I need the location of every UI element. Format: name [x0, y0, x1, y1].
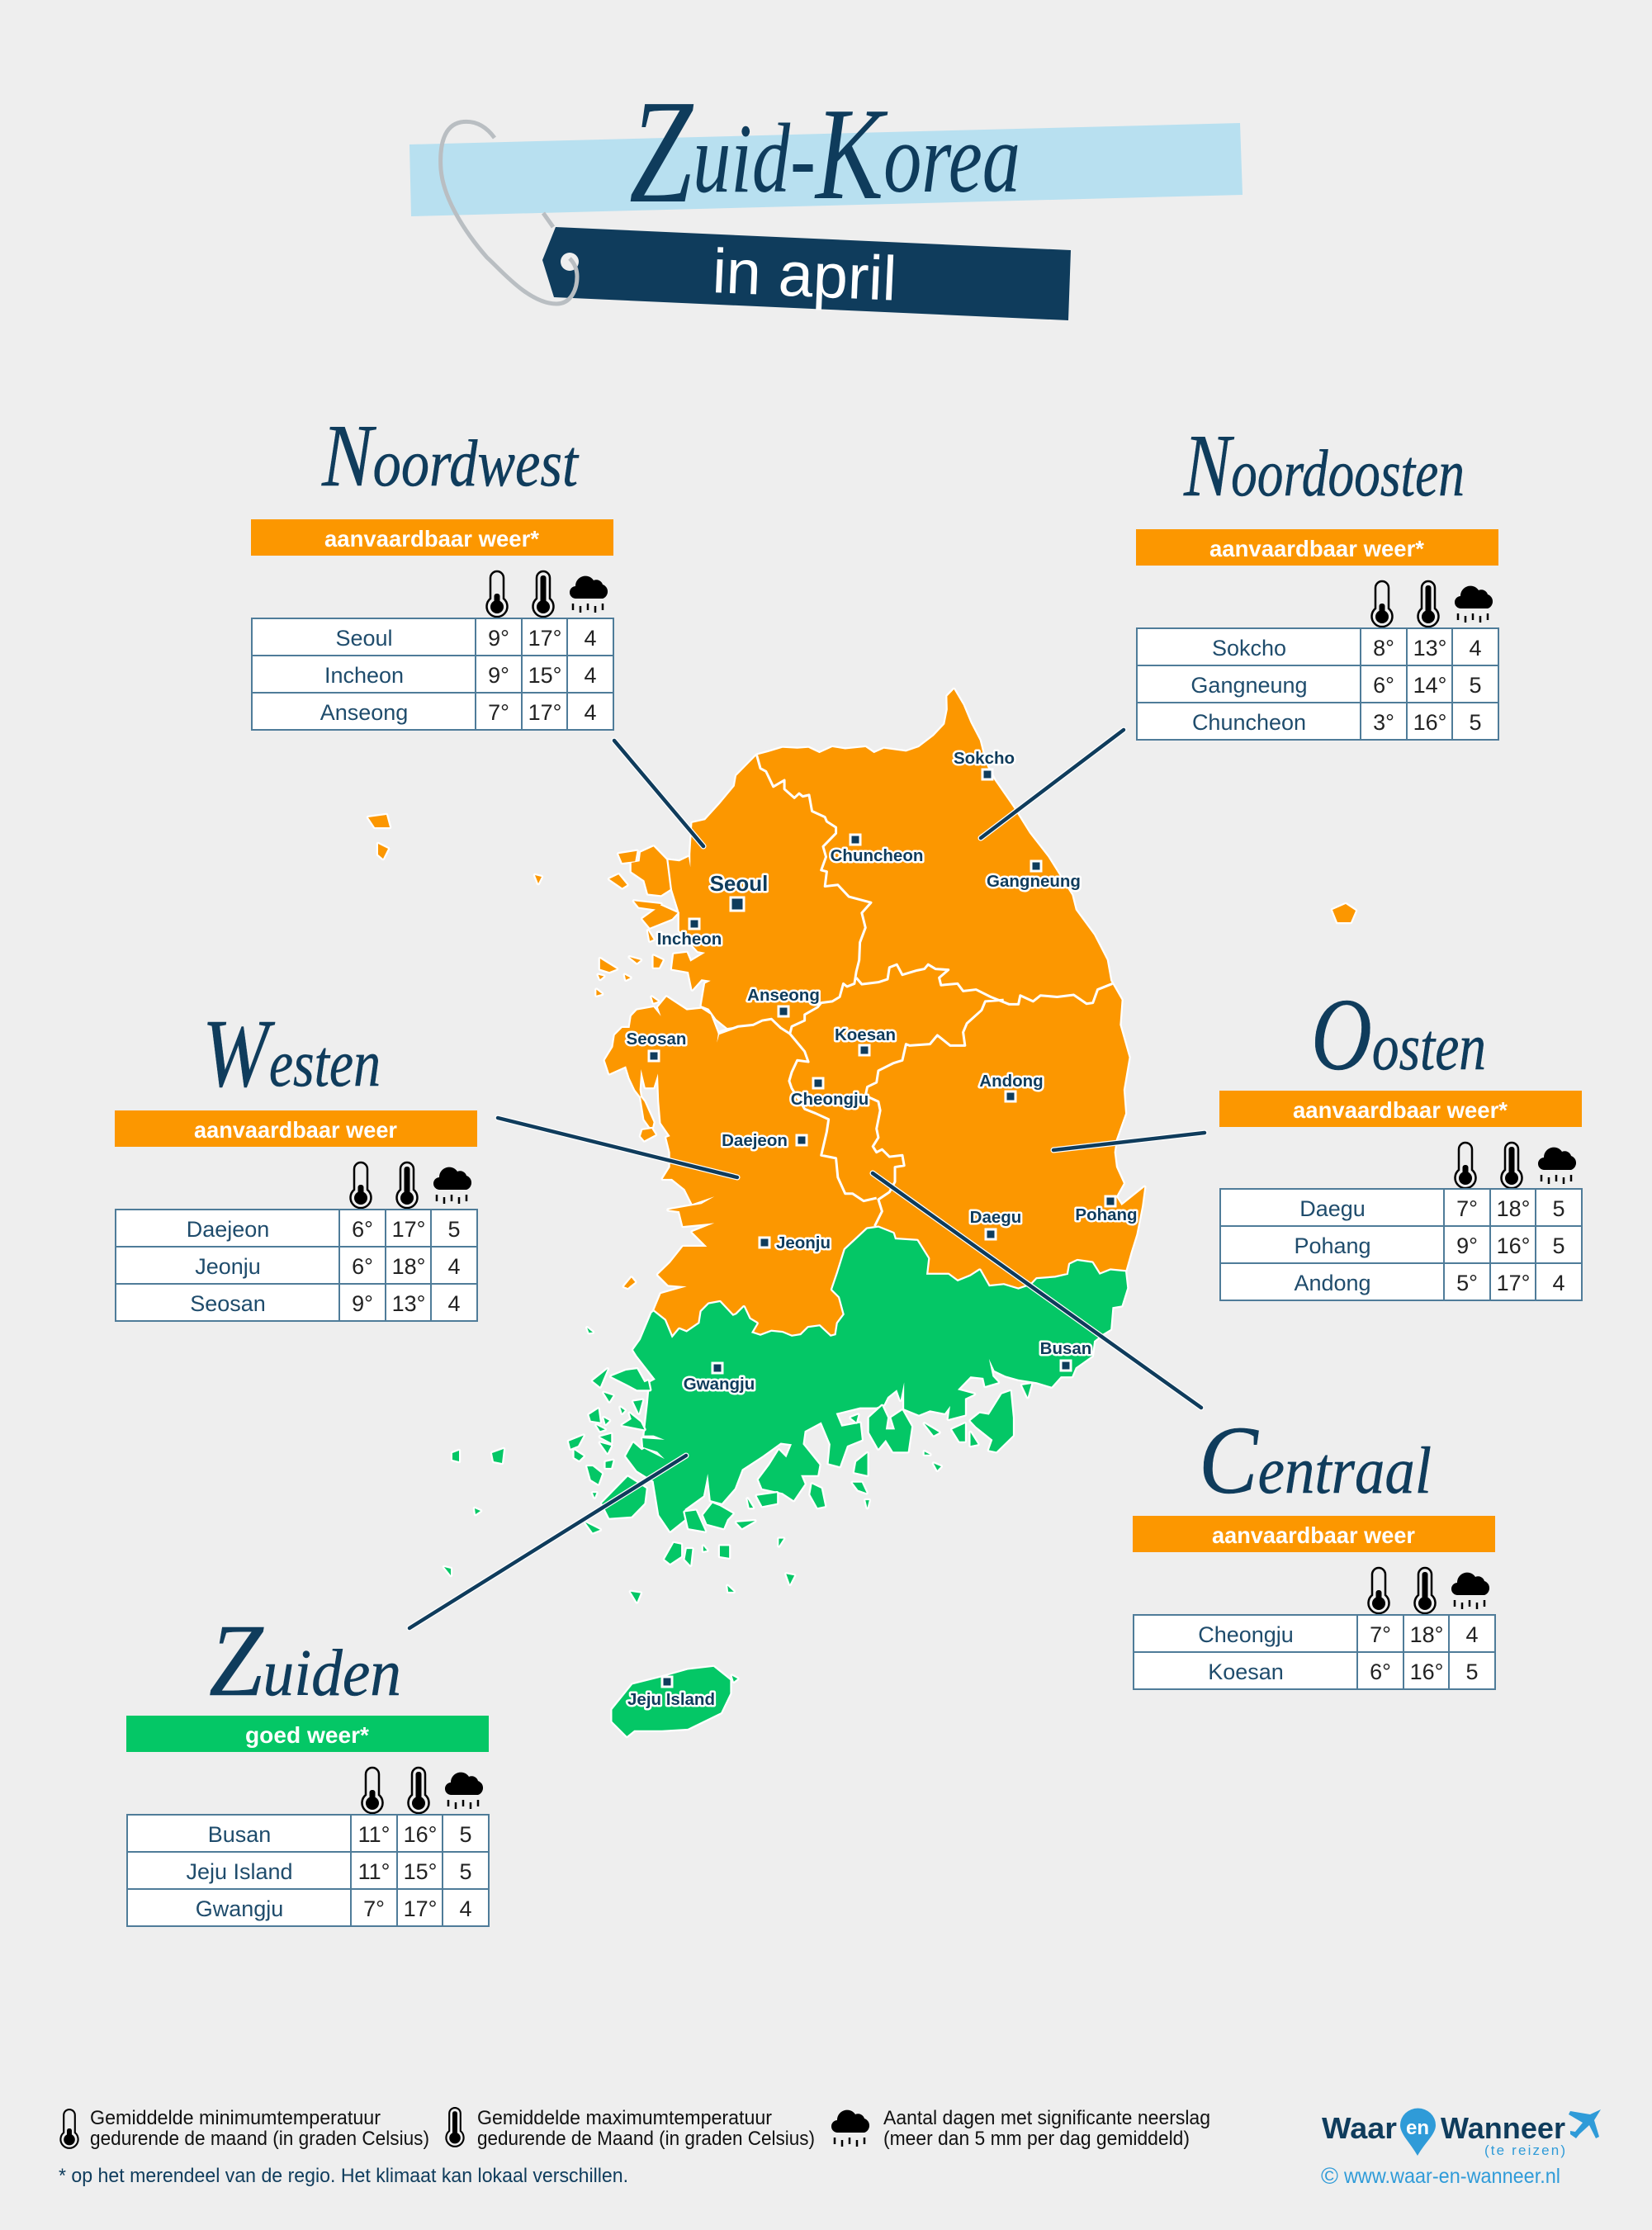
- weather table: 9°: [352, 1291, 373, 1316]
- weather table: 7°: [488, 700, 509, 725]
- status bar: [1133, 1516, 1495, 1552]
- city: Chuncheon: [831, 835, 923, 865]
- weather table: 5: [459, 1822, 472, 1847]
- icon: weather icons: [1455, 1143, 1576, 1188]
- dark tag: [542, 227, 1071, 320]
- city: Anseong: Anseong: [747, 986, 820, 1005]
- city: Busan: [1040, 1339, 1091, 1371]
- weather table: [1137, 628, 1498, 740]
- weather table: Sokcho: [1212, 636, 1286, 660]
- weather table: 16°: [404, 1822, 437, 1847]
- city: Gwangju: [684, 1363, 755, 1394]
- leader: Centraal: [873, 1173, 1201, 1408]
- weather table: 5: [447, 1217, 461, 1242]
- logo text: (te reizen): [1484, 2142, 1565, 2158]
- city: Jeju Island: Jeju Island: [627, 1690, 715, 1709]
- weather table: Seosan: [190, 1291, 266, 1316]
- city: Incheon: Incheon: [657, 930, 722, 949]
- legend text: maximum temperature: Gemiddelde maximumtemperatuur: [477, 2107, 772, 2129]
- weather table: 5: [1469, 710, 1482, 735]
- title text: Z: [629, 69, 694, 234]
- icon: minimum temperature: [60, 2109, 78, 2148]
- weather table: 13°: [1413, 636, 1446, 660]
- weather table: 9°: [488, 663, 509, 688]
- title banner: [409, 69, 1243, 320]
- city: Daegu: [970, 1208, 1021, 1239]
- weather table: 14°: [1413, 673, 1446, 698]
- legend text: minimum temperature: gedurende de maand (in graden Celsius): [90, 2128, 429, 2150]
- city: Pohang: Pohang: [1075, 1205, 1138, 1224]
- status bar: goed weer*: [245, 1722, 369, 1748]
- weather table: 9°: [1456, 1233, 1478, 1258]
- weather table: 4: [1465, 1622, 1479, 1647]
- panel: Centraal: [1133, 1406, 1495, 1689]
- city: Jeonju: Jeonju: [776, 1233, 831, 1252]
- weather table: 17°: [392, 1217, 425, 1242]
- heading: Westen: Westen: [202, 999, 381, 1107]
- weather table: Busan: [208, 1822, 271, 1847]
- weather table: [1134, 1615, 1495, 1689]
- city: Gangneung: Gangneung: [987, 872, 1081, 891]
- south region, green: [569, 1228, 1127, 1584]
- legend text: minimum temperature: [90, 2107, 429, 2150]
- weather table: 5: [1552, 1233, 1565, 1258]
- weather table: [1220, 1189, 1582, 1300]
- status bar: [251, 519, 613, 556]
- map of South Korea: [368, 689, 1356, 1736]
- weather table: 6°: [352, 1217, 373, 1242]
- heading: Zuiden: Zuiden: [209, 1604, 401, 1718]
- city: Koesan: Koesan: [835, 1025, 896, 1044]
- icon: maximum temperature: [446, 2108, 464, 2147]
- logo: Waar en Wanneer: [1321, 2109, 1601, 2189]
- weather table: 4: [584, 626, 597, 651]
- weather table: [127, 1815, 489, 1926]
- region borders: [718, 755, 1112, 1226]
- status bar: aanvaardbaar weer*: [324, 526, 539, 552]
- icon: weather icons: [1372, 581, 1493, 627]
- city: Andong: [979, 1072, 1044, 1101]
- weather table: 7°: [1370, 1622, 1391, 1647]
- tag string: [441, 121, 577, 304]
- north and centre regions, orange: [596, 689, 1144, 1338]
- website link: www.waar-en-wanneer.nl: [1343, 2165, 1560, 2188]
- icon: precipitation: [831, 2110, 869, 2147]
- far western islands, green: [444, 1449, 504, 1575]
- weather table: [116, 1210, 477, 1321]
- city: Anseong: [747, 986, 820, 1016]
- northwest islands: [596, 846, 678, 1288]
- city: Pohang: [1075, 1196, 1138, 1224]
- weather table: 4: [584, 700, 597, 725]
- weather table: 15°: [404, 1859, 437, 1884]
- legend text: maximum temperature: [477, 2107, 815, 2150]
- status bar: aanvaardbaar weer*: [1209, 536, 1424, 561]
- weather table: Pohang: [1294, 1233, 1371, 1258]
- weather table: 5: [459, 1859, 472, 1884]
- icon: plane: [1569, 2109, 1601, 2138]
- weather table: 16°: [1413, 710, 1446, 735]
- weather table: 7°: [363, 1896, 385, 1921]
- far islands, orange: [368, 815, 1356, 922]
- city: Cheongju: [791, 1078, 869, 1109]
- tag hole: [561, 253, 579, 271]
- city: Seosan: Seosan: [627, 1030, 686, 1049]
- weather table: 6°: [352, 1254, 373, 1279]
- status bar: aanvaardbaar weer: [1212, 1522, 1415, 1548]
- footnote: * op het merendeel van de regio. Het klimaat kan lokaal verschillen.: [59, 2165, 628, 2187]
- city: Andong: Andong: [979, 1072, 1044, 1091]
- city: Daegu: Daegu: [970, 1208, 1021, 1227]
- weather table: 18°: [1410, 1622, 1443, 1647]
- city: Gwangju: Gwangju: [684, 1375, 755, 1394]
- icon: weather icons: [1369, 1568, 1489, 1613]
- panel: Westen: [115, 999, 477, 1321]
- heading: Oosten: Oosten: [1311, 978, 1486, 1092]
- legend text: precipitation: [883, 2107, 1210, 2150]
- title text: uid-: [693, 103, 816, 213]
- weather table: 15°: [528, 663, 561, 688]
- weather table: 5: [1465, 1659, 1479, 1684]
- city: Seoul: Seoul: [710, 871, 768, 896]
- weather table: 17°: [528, 700, 561, 725]
- Jeju island and small southern islands: [613, 1586, 737, 1736]
- weather table: 16°: [1410, 1659, 1443, 1684]
- title text: orea: [883, 103, 1020, 213]
- weather table: 11°: [358, 1859, 390, 1884]
- weather table: Incheon: [324, 663, 404, 688]
- logo text: Waar: [1322, 2111, 1397, 2145]
- legend: [59, 2107, 1210, 2187]
- weather table: 5: [1552, 1196, 1565, 1221]
- weather table: Chuncheon: [1192, 710, 1306, 735]
- weather table: Cheongju: [1198, 1622, 1294, 1647]
- weather table: 3°: [1373, 710, 1394, 735]
- panel: Oosten: [1219, 978, 1582, 1300]
- city: Sokcho: Sokcho: [954, 749, 1015, 768]
- weather table: [252, 618, 613, 730]
- logo text: [1322, 2111, 1565, 2158]
- weather table: 13°: [392, 1291, 425, 1316]
- status bar: aanvaardbaar weer: [194, 1117, 397, 1143]
- heading: Centraal: Centraal: [1199, 1406, 1432, 1514]
- weather table: 4: [459, 1896, 472, 1921]
- legend text: maximum temperature: gedurende de Maand (in graden Celsius): [477, 2128, 815, 2150]
- weather table: 5: [1469, 673, 1482, 698]
- status bar: [126, 1716, 489, 1752]
- city: Busan: Busan: [1040, 1339, 1091, 1358]
- weather table: 16°: [1497, 1233, 1530, 1258]
- status bar: aanvaardbaar weer*: [1293, 1097, 1508, 1123]
- light blue title band: [409, 123, 1243, 216]
- weather table: 6°: [1370, 1659, 1391, 1684]
- weather table: 4: [584, 663, 597, 688]
- weather table: Koesan: [1208, 1659, 1284, 1684]
- weather table: 4: [447, 1291, 461, 1316]
- city: Gangneung: [987, 861, 1081, 891]
- heading: Noordoosten: Noordoosten: [1183, 417, 1465, 515]
- subtitle: in april: [711, 236, 898, 315]
- weather table: 17°: [528, 626, 561, 651]
- city: Jeju Island: [627, 1677, 715, 1709]
- weather table: Daegu: [1299, 1196, 1366, 1221]
- logo pin: [1400, 2109, 1436, 2156]
- city: Seosan: [627, 1030, 686, 1061]
- panel: Noordoosten: [1136, 417, 1498, 740]
- status bar: [1136, 529, 1498, 566]
- leader: Zuiden: [409, 1456, 686, 1628]
- weather table: 18°: [1497, 1196, 1530, 1221]
- weather table: 9°: [488, 626, 509, 651]
- weather table: 4: [447, 1254, 461, 1279]
- weather table: 5°: [1456, 1271, 1478, 1295]
- legend text: minimum temperature: Gemiddelde minimumtemperatuur: [90, 2107, 381, 2129]
- leader: Noordwest: [614, 741, 703, 846]
- city: Seoul: [710, 871, 768, 911]
- leader lines: [409, 730, 1205, 1628]
- heading: Noordwest: Noordwest: [321, 407, 580, 505]
- title text: K: [814, 80, 888, 227]
- city: Sokcho: [954, 749, 1015, 779]
- weather table: 8°: [1373, 636, 1394, 660]
- panel: Zuiden: [126, 1604, 489, 1926]
- leader: Noordoosten: [981, 730, 1124, 838]
- legend text: precipitation: Aantal dagen met significante neerslag: [883, 2107, 1210, 2129]
- status bar: [115, 1110, 477, 1147]
- city: Incheon: [657, 919, 722, 949]
- city: Chuncheon: Chuncheon: [831, 846, 923, 865]
- status bar: [1219, 1091, 1582, 1127]
- weather table: Jeonju: [195, 1254, 261, 1279]
- city: Koesan: [835, 1025, 896, 1055]
- weather table: Gangneung: [1190, 673, 1308, 698]
- weather table: Jeju Island: [186, 1859, 293, 1884]
- weather table: 11°: [358, 1822, 390, 1847]
- city labels: [627, 749, 1138, 1709]
- weather table: 18°: [392, 1254, 425, 1279]
- weather table: Gwangju: [196, 1896, 283, 1921]
- weather table: Daejeon: [187, 1217, 269, 1242]
- weather table: 6°: [1373, 673, 1394, 698]
- leader: Westen: [498, 1118, 737, 1177]
- weather table: Andong: [1294, 1271, 1371, 1295]
- panel: Noordwest: [251, 407, 613, 730]
- weather table: 4: [1469, 636, 1482, 660]
- southern islands: [569, 1328, 1031, 1584]
- city: Daejeon: Daejeon: [722, 1131, 788, 1150]
- legend text: precipitation: (meer dan 5 mm per dag gemiddeld): [883, 2128, 1190, 2150]
- weather table: 7°: [1456, 1196, 1478, 1221]
- logo text: en: [1406, 2117, 1429, 2139]
- weather table: Anseong: [320, 700, 408, 725]
- website link: ©: [1321, 2163, 1338, 2189]
- city: Cheongju: Cheongju: [791, 1090, 869, 1109]
- leader: Oosten: [1053, 1133, 1205, 1150]
- icon: weather icons: [362, 1768, 483, 1813]
- icon: weather icons: [487, 571, 608, 617]
- weather table: 4: [1552, 1271, 1565, 1295]
- icon: weather icons: [350, 1162, 471, 1208]
- logo text: Wanneer: [1441, 2111, 1565, 2145]
- weather table: 17°: [404, 1896, 437, 1921]
- weather table: Seoul: [335, 626, 393, 651]
- weather table: 17°: [1497, 1271, 1530, 1295]
